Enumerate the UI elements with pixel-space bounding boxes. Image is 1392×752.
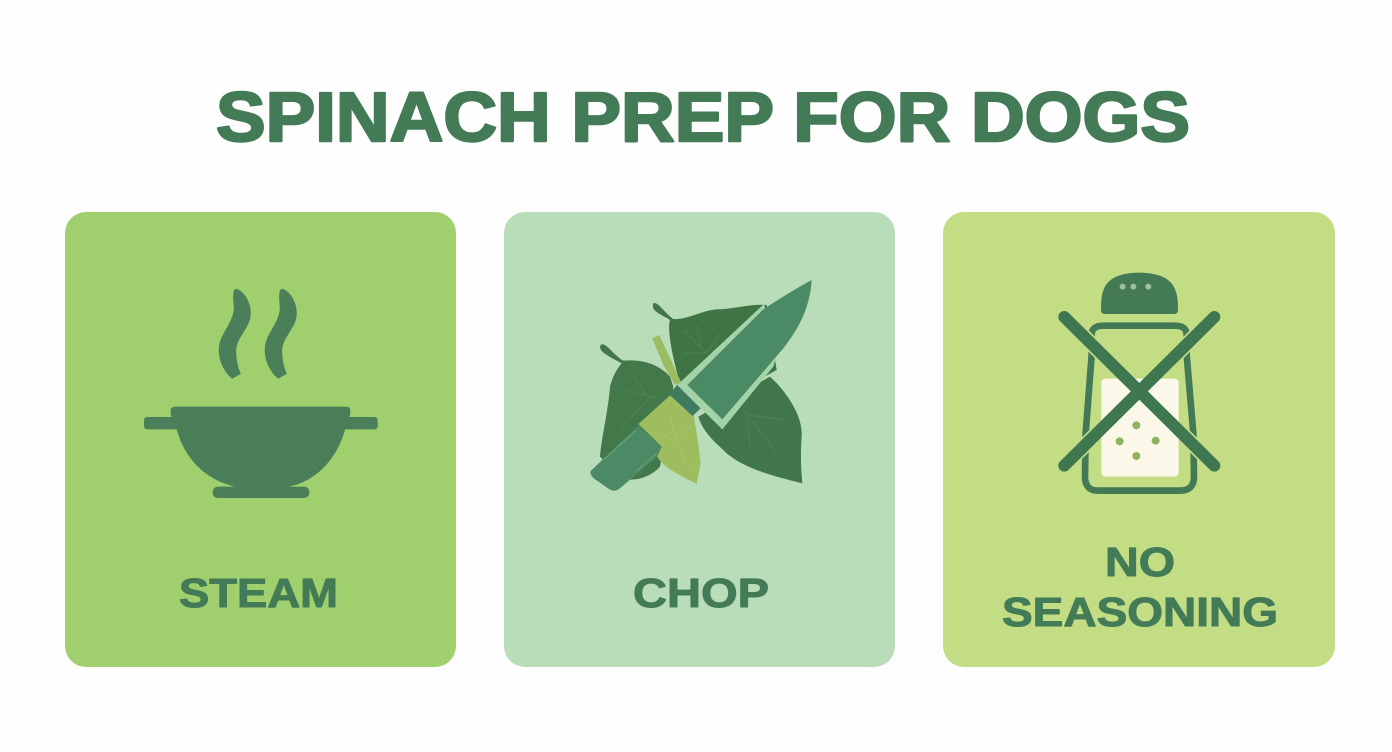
label: seasoning: SEASONING bbox=[1002, 589, 1278, 635]
label: chop: CHOP bbox=[633, 570, 769, 616]
chop card background bbox=[504, 212, 895, 667]
icon: knife and leaves bbox=[590, 280, 812, 491]
panel: steam bbox=[65, 212, 456, 667]
title: SPINACH PREP FOR DOGS bbox=[216, 78, 1190, 156]
no seasoning card background bbox=[943, 212, 1335, 667]
steam card background bbox=[65, 212, 456, 667]
label: steam: STEAM bbox=[179, 570, 338, 616]
panel: chop bbox=[504, 212, 895, 667]
icon: crossed salt shaker bbox=[1064, 273, 1214, 491]
icon: steaming bowl bbox=[144, 290, 378, 498]
panel: no seasoning bbox=[943, 212, 1335, 667]
label: no: NO bbox=[1105, 539, 1175, 585]
